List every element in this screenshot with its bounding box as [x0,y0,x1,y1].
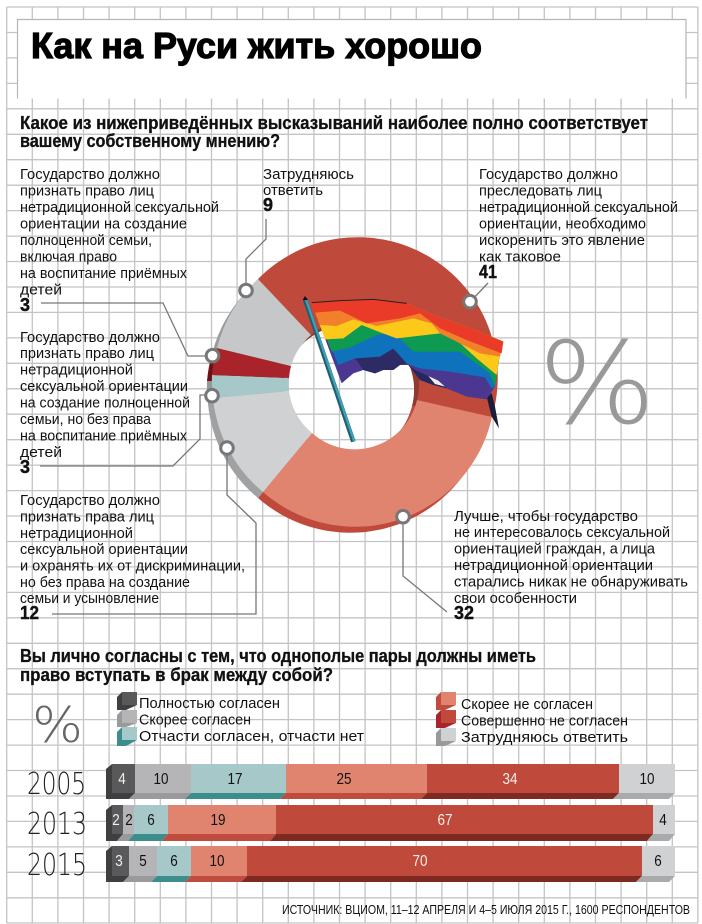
label: family without adoption: 3 [20,457,30,477]
year label 2013: 2013 [27,807,87,842]
label: persecute: 41 [479,262,497,282]
connector: 9 [246,219,266,290]
connector: 12 [52,448,256,614]
label: recognise family including adoption: на воспитание приёмных [20,265,187,282]
big percent sign: % [538,318,656,450]
label: persecute: как таковое [479,248,561,266]
label: family without adoption: Государство должно [20,329,160,346]
label: recognise family including adoption: включая право [20,248,117,266]
legend [117,692,628,746]
label: protect from discrimination: сексуальной ориентации [20,541,188,558]
label: persecute: ориентации, необходимо [479,216,646,232]
label: recognise family including adoption [20,166,219,315]
bar 2015: 70 [412,853,428,870]
label: state should not care: 32 [454,603,474,623]
label: hard to answer: Затрудняюсь [263,166,354,183]
bar 2015: 5 [139,853,147,870]
label: protect from discrimination [20,492,245,623]
heading: first question [20,113,648,151]
title: Как на Руси жить хорошо [31,25,482,66]
heading: second question: право вступать в брак между собой? [20,665,333,685]
label: recognise family including adoption: детей [20,282,62,298]
label: protect from discrimination: признать права лиц [20,508,154,526]
bar 2015: 6 [654,853,662,870]
legend item: fully agree: Полностью согласен [139,695,280,712]
connector: 3 lower [40,395,212,466]
bar 2005: 34 [502,771,518,788]
label: family without adoption: нетрадиционной [20,362,133,378]
label: persecute [479,166,678,282]
label: recognise family including adoption: нетрадиционной сексуальной [20,199,219,216]
segment 32 [263,400,492,527]
marker: 3 lower [206,389,218,402]
label: persecute: нетрадиционной сексуальной [479,199,678,216]
label: persecute: искоренить это явление [479,232,645,249]
label: family without adoption: детей [20,444,62,461]
bar 2013: 6 [147,812,155,829]
legend item: rather agree: Скорее согласен [139,712,251,728]
label: protect from discrimination: но без права на создание [20,574,190,591]
connector: 3 upper [41,303,212,356]
bar 2015: 10 [210,853,225,870]
bar 2005: 17 [228,771,243,788]
label: state should not care: ориентацией граждан, а лица [454,540,656,558]
label: state should not care: старались никак не обнаруживать [454,574,688,590]
bar 2015: 6 [170,853,178,870]
marker: 41 [464,295,476,308]
label: recognise family including adoption: Государство должно [20,166,160,183]
label: hard to answer [263,166,354,215]
bar 2013: 19 [210,812,226,829]
label: state should not care: не интересовалось сексуальной [454,524,670,541]
label: state should not care: нетрадиционной ориентации [454,557,653,574]
bar 2013: 2 [125,812,133,829]
label: state should not care [454,508,688,623]
bar 2015: 3 [115,853,123,870]
legend item: partly agree: Отчасти согласен, отчасти нет [139,728,364,745]
label: protect from discrimination: и охранять их от дискриминации, [20,558,245,574]
year label 2015: 2015 [27,848,87,883]
bar 2013: 2 [112,812,120,829]
panel: donut chart [207,237,498,533]
label: state should not care: свои особенности [454,590,577,607]
label: hard to answer: 9 [263,195,273,215]
bar 2005 [106,764,675,799]
heading: first question: вашему собственному мнению? [20,131,280,151]
label: protect from discrimination: нетрадиционной [20,525,133,542]
label: family without adoption: признать право лиц [20,345,154,362]
label: protect from discrimination: Государство должно [20,492,160,509]
heading: second question: Вы лично согласны с тем, что однополые пары должны иметь [20,646,536,666]
bar 2013: 67 [438,812,453,829]
donut extrusion [207,243,493,533]
label: protect from discrimination: 12 [20,603,39,623]
label: hard to answer: ответить [263,182,323,199]
segment 41 [258,237,498,417]
connectors and markers [40,219,488,614]
label: persecute: преследовать лиц [479,182,602,200]
legend item: rather disagree [436,692,593,713]
label: family without adoption: семьи, но без права [20,411,152,428]
label: state should not care: Лучше, чтобы государство [454,508,638,525]
marker: 9 [240,284,252,297]
bar 2005: 4 [118,771,126,788]
heading: first question: Какое из нижеприведённых высказываний наиболее полно соответствует [20,113,648,133]
label: family without adoption: сексуальной ориентации [20,378,188,395]
marker: 3 upper [206,349,219,362]
label: family without adoption: на создание полноценной [20,394,190,412]
label: recognise family including adoption: ориентации на создание [20,216,187,232]
bar 2013 [106,805,675,841]
segment 3 teal [212,375,289,398]
label: family without adoption [20,329,190,477]
label: persecute: Государство должно [479,166,618,183]
small percent sign: % [32,697,83,754]
bar 2005: 25 [336,771,352,788]
marker: 12 [221,442,233,454]
segment 12 [213,391,312,492]
segment 3 red [212,348,291,378]
marker: 32 [397,510,409,523]
label: recognise family including adoption: 3 [20,295,30,315]
connector: 32 [403,516,447,612]
year label 2005: 2005 [27,767,86,802]
legend item: hard to answer: Затрудняюсь ответить [461,729,628,746]
label: recognise family including adoption: признать право лиц [20,182,154,200]
label: protect from discrimination: семьи и усыновление [20,590,159,607]
bar 2013: 4 [659,812,667,829]
icon: rainbow flag [303,296,503,442]
legend item: completely disagree: Совершенно не согласен [461,712,628,730]
legend item: rather disagree: Скорее не согласен [461,696,593,713]
segment 9 [217,279,311,366]
bar 2015 [106,846,675,882]
label: recognise family including adoption: полноценной семьи, [20,232,152,249]
label: family without adoption: на воспитание приёмных [20,428,187,444]
bar 2005: 10 [640,771,655,788]
title panel [18,20,686,98]
heading: second question [20,646,536,685]
connector: 41 [470,283,488,302]
bar 2005: 10 [154,771,169,788]
